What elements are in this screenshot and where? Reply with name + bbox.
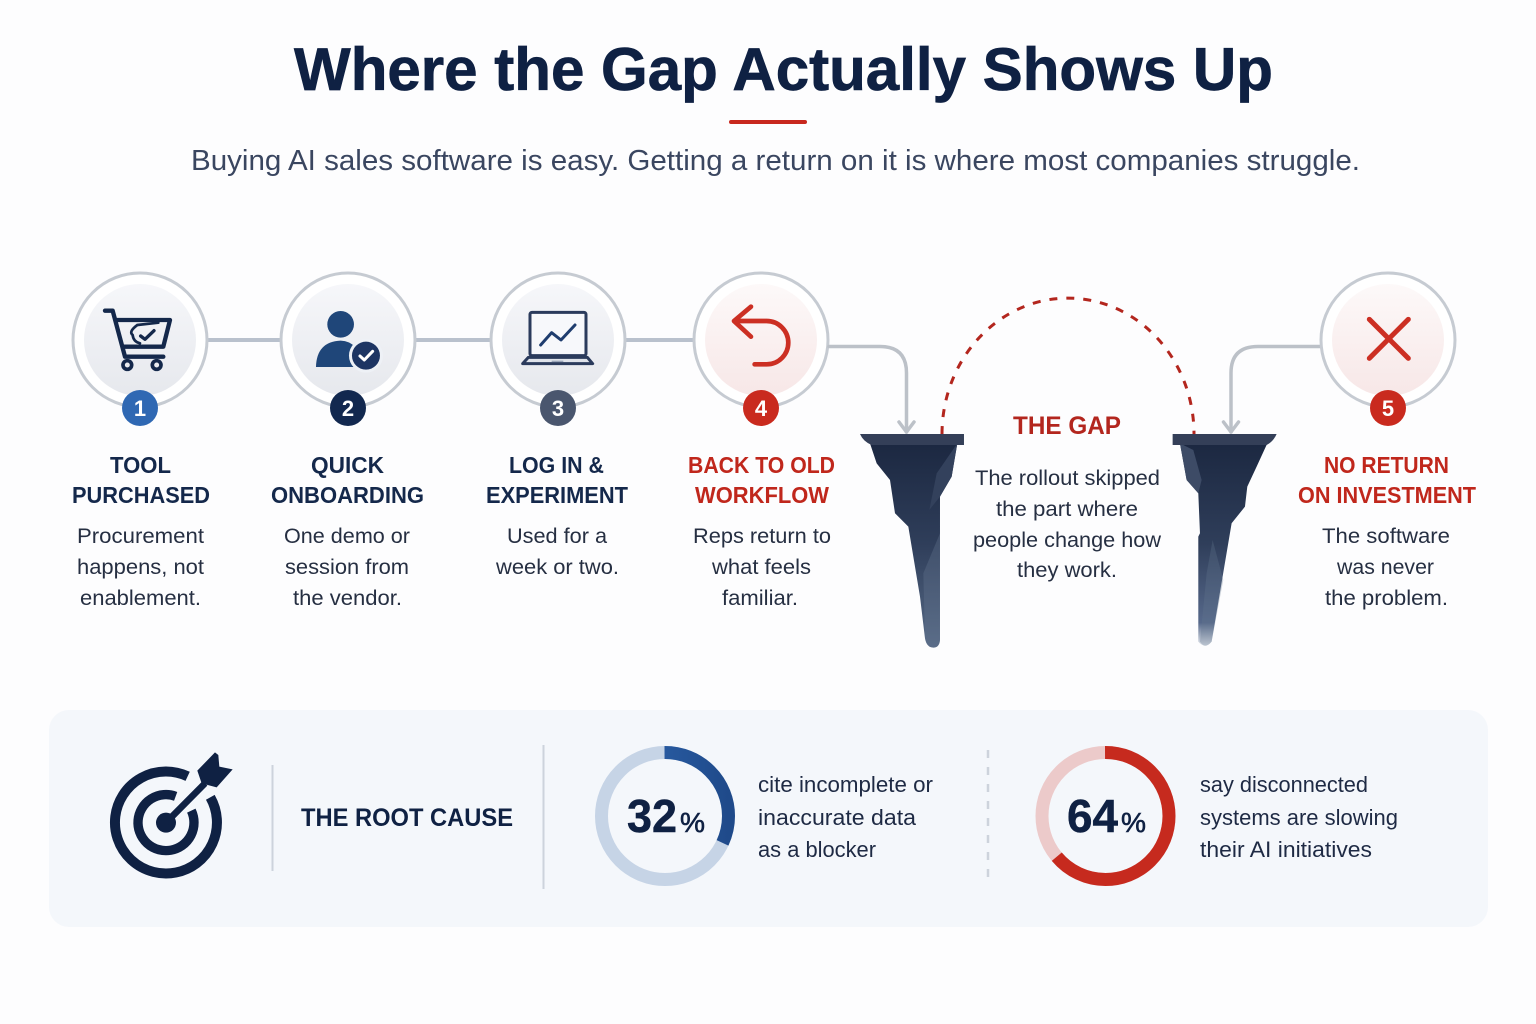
step 2 description: session from [285,555,409,579]
step 1 description [77,524,204,610]
step 2 description [284,524,410,610]
icon: return arrow [734,307,788,364]
stat text: 32 percent [758,772,933,862]
step 2 badge [330,390,366,426]
gap description: the part where [996,497,1138,521]
stat text: 64 percent [1200,772,1398,862]
icon: shopping cart [105,311,170,369]
connector lines between steps 1 to 4 [207,338,695,342]
step 1 heading: PURCHASED [72,482,210,508]
step 2 heading: QUICK [311,452,384,478]
step 4 description: what feels [711,555,811,579]
step 4 heading: BACK TO OLD [688,452,835,478]
step 4 heading [688,452,835,508]
step 4 heading: WORKFLOW [695,482,829,508]
step 4 badge [743,390,779,426]
step 2 description: the vendor. [293,586,402,610]
step 2 heading [271,452,424,508]
step 1 description: enablement. [80,586,201,610]
root cause label: THE ROOT CAUSE [301,804,513,832]
stat text: 64 percent: their AI initiatives [1200,837,1372,862]
step 4 badge: 4 [755,396,768,421]
stat text: 32 percent: cite incomplete or [758,772,933,797]
icon: red X [1369,319,1408,358]
gap description: The rollout skipped [975,466,1160,490]
step 1 heading: TOOL [110,452,171,478]
stat text: 64 percent: say disconnected [1200,772,1368,797]
gap description [973,466,1161,582]
step 5: no return on investment [1298,273,1476,610]
step 5 badge: 5 [1382,396,1394,421]
stat text: 32 percent: as a blocker [758,837,876,862]
step 3 badge [540,390,576,426]
subtitle: Buying AI sales software is easy. Getting a return on it is where most companies struggle. [191,145,1360,177]
step 1: tool purchased [72,273,210,610]
step 1 heading [72,452,210,508]
step 3: log in and experiment [486,273,628,579]
right cliff [1173,434,1277,646]
donut chart: 64 percent: % [1121,807,1146,838]
step 3 heading: EXPERIMENT [486,482,628,508]
step 5 description: was never [1336,555,1434,579]
step 3 description: Used for a [507,524,607,548]
step 4: back to old workflow [688,273,835,610]
step 5 description: the problem. [1325,586,1448,610]
donut chart: 32 percent: 32 [627,790,677,842]
step 5 description: The software [1322,524,1450,548]
donut chart: 32 percent [602,752,728,880]
gap description: they work. [1017,558,1117,582]
step 2: quick onboarding [271,273,424,610]
step 1 badge [122,390,158,426]
dashed arc over the gap [942,298,1194,434]
icon: laptop with trend line [523,312,593,364]
donut chart: 64 percent: 64 [1067,790,1118,842]
step 3 heading [486,452,628,508]
step 3 description: week or two. [495,555,619,579]
step 5 heading [1298,452,1476,508]
gap heading: THE GAP [1013,412,1121,440]
title: Where the Gap Actually Shows Up [294,36,1273,103]
step 2 description: One demo or [284,524,410,548]
step 3 heading: LOG IN & [509,452,604,478]
step 5 heading: ON INVESTMENT [1298,482,1476,508]
panel: the root cause [49,710,1488,927]
step 2 badge: 2 [342,396,354,421]
arrow: step 5 into the gap [1224,346,1322,432]
step 3 badge: 3 [552,396,564,421]
step 5 badge [1370,390,1406,426]
title underline accent [729,120,807,124]
stat text: 64 percent: systems are slowing [1200,805,1398,830]
stat text: 32 percent: inaccurate data [758,805,917,830]
step 1 description: Procurement [77,524,204,548]
donut chart: 64 percent [1042,752,1169,880]
step 4 description: familiar. [722,586,798,610]
step 2 heading: ONBOARDING [271,482,424,508]
step 5 heading: NO RETURN [1324,452,1449,478]
left cliff [860,434,964,648]
step 4 description: Reps return to [693,524,831,548]
donut chart: 32 percent: % [680,807,705,838]
icon: target with arrow [115,752,233,873]
step 1 description: happens, not [77,555,204,579]
step 5 description [1322,524,1450,610]
step 1 badge: 1 [134,396,146,421]
step 4 description [693,524,831,610]
gap description: people change how [973,528,1161,552]
icon: user with check [316,311,383,373]
arrow: step 4 into the gap [829,346,914,432]
step 3 description [495,524,619,579]
